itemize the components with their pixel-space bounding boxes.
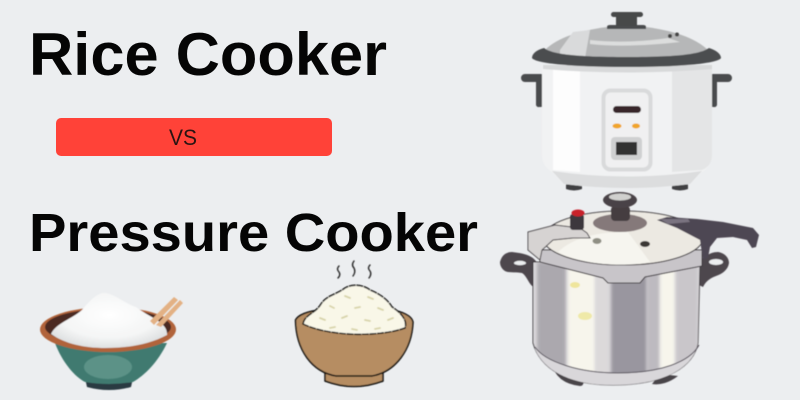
bowl base bbox=[85, 378, 133, 390]
bowl body bbox=[55, 343, 167, 384]
feet bbox=[566, 184, 688, 190]
icon: brown rice bowl with steam bbox=[296, 261, 413, 386]
long handle bbox=[657, 217, 759, 260]
lid bbox=[543, 211, 703, 265]
lid band bbox=[540, 250, 702, 283]
rice bbox=[303, 285, 406, 334]
icon: pressure cooker bbox=[500, 192, 759, 390]
lid bbox=[542, 27, 712, 58]
body reflections bbox=[533, 262, 699, 390]
body bbox=[542, 65, 712, 188]
rim bbox=[532, 48, 721, 67]
icon: rice cooker bbox=[521, 12, 732, 190]
chopsticks bbox=[150, 297, 183, 327]
title: Rice Cooker: Rice Cooker bbox=[29, 21, 387, 88]
title: Pressure Cooker: Pressure Cooker bbox=[29, 203, 478, 263]
VS banner bbox=[56, 118, 332, 156]
weight knob bbox=[593, 214, 647, 232]
icon: green rice bowl with chopsticks bbox=[40, 293, 183, 390]
control panel bbox=[604, 90, 650, 170]
pressure valve bbox=[570, 214, 584, 230]
VS banner: VS bbox=[169, 125, 197, 150]
rice grains bbox=[320, 296, 393, 330]
side handles bbox=[500, 252, 542, 287]
vent holes bbox=[668, 34, 672, 38]
body bbox=[533, 262, 700, 385]
lid bracket bbox=[528, 225, 590, 260]
foot bbox=[325, 372, 383, 386]
bowl bbox=[296, 310, 413, 376]
handles bbox=[521, 74, 732, 107]
knob bbox=[607, 25, 646, 29]
feet bbox=[555, 372, 678, 386]
steam bbox=[338, 261, 371, 278]
bowl rim bbox=[40, 307, 176, 352]
rice bbox=[51, 293, 167, 348]
